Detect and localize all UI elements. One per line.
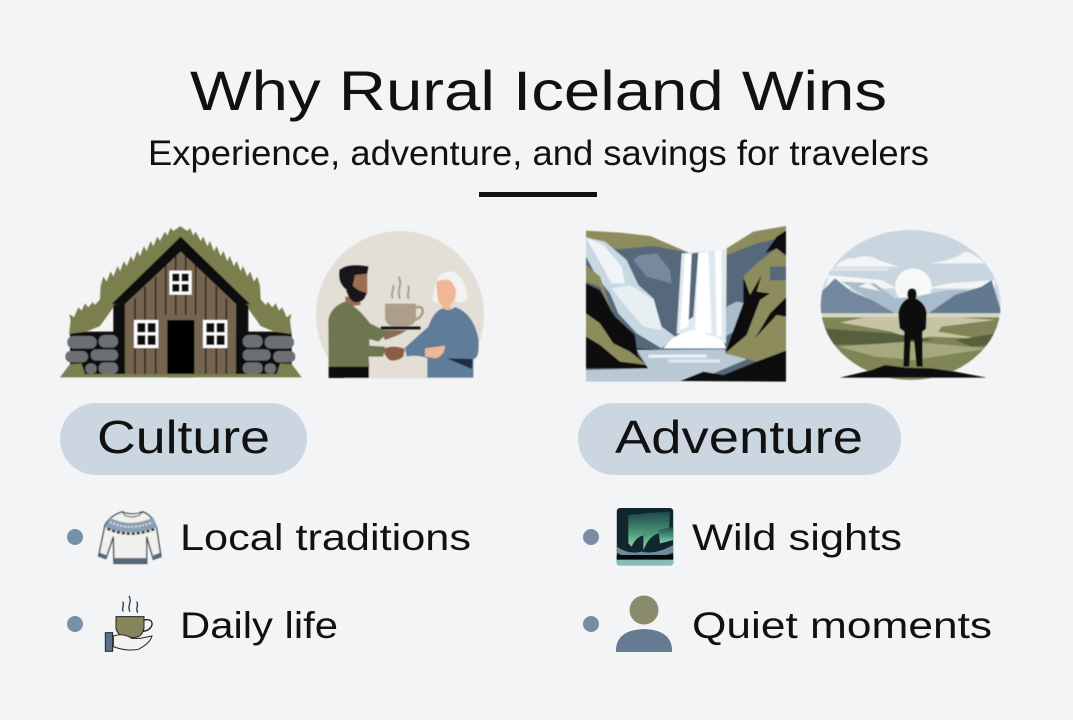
- icon: northern lights: [617, 508, 673, 566]
- icon: host greeting with coffee: [316, 230, 484, 379]
- label: Daily life: Daily life: [180, 605, 338, 646]
- title divider: [479, 192, 597, 197]
- icon: traveler in landscape: [815, 225, 1005, 381]
- bullet: [583, 616, 599, 632]
- pill: Culture: Culture: [97, 411, 270, 463]
- bullet: [583, 529, 599, 545]
- pill: Culture: [60, 403, 307, 475]
- pill: Adventure: Adventure: [615, 411, 863, 463]
- icon: person: [616, 596, 672, 652]
- label: Local traditions: Local traditions: [180, 517, 471, 558]
- icon: waterfall: [586, 226, 786, 382]
- pill: Adventure: [578, 403, 901, 475]
- title: Why Rural Iceland Wins: [190, 59, 887, 122]
- label: Wild sights: Wild sights: [692, 517, 902, 558]
- icon: Icelandic sweater: [99, 512, 161, 563]
- icon: turf house: [60, 226, 302, 377]
- subtitle: Experience, adventure, and savings for travelers: [148, 134, 929, 173]
- bullet: [67, 529, 83, 545]
- label: Quiet moments: Quiet moments: [692, 605, 992, 646]
- icon: coffee in hand: [105, 596, 152, 651]
- bullet: [67, 616, 83, 632]
